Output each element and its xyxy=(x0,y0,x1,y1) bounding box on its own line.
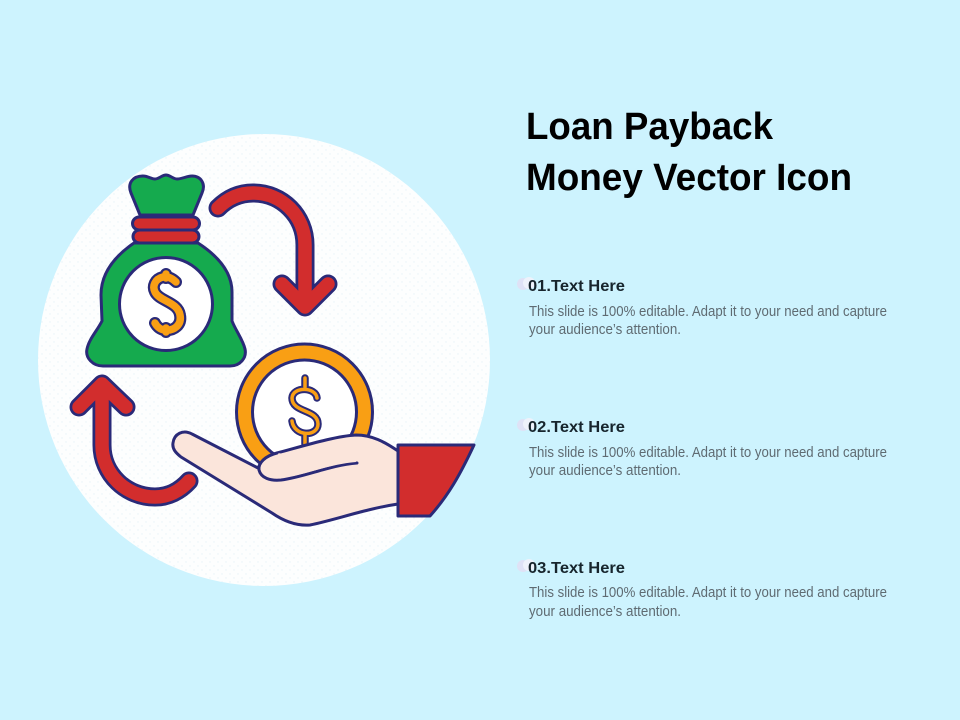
icon: hand and sleeve xyxy=(173,432,474,525)
description 02: your audience’s attention. xyxy=(529,462,681,479)
title xyxy=(526,106,852,199)
bullet 03 xyxy=(517,559,535,572)
description 01: This slide is 100% editable. Adapt it to your need and capture xyxy=(529,303,887,320)
bag body xyxy=(87,243,245,366)
arrow: bag to coin xyxy=(218,193,328,307)
coin dollar sign xyxy=(292,378,318,444)
item 01 xyxy=(517,277,887,338)
description 02: This slide is 100% editable. Adapt it to your need and capture xyxy=(529,444,887,461)
panel: white dotted circle xyxy=(38,134,490,586)
item 03 xyxy=(517,559,887,620)
icon: coin xyxy=(236,344,372,480)
description 03: This slide is 100% editable. Adapt it to your need and capture xyxy=(529,584,887,601)
icon: money bag xyxy=(87,175,245,366)
description 03: your audience’s attention. xyxy=(529,603,681,620)
description 03 xyxy=(529,584,887,620)
title: Money Vector Icon xyxy=(526,157,852,199)
heading 01: 01.Text Here xyxy=(528,278,625,295)
heading 03: 03.Text Here xyxy=(528,560,625,577)
sleeve xyxy=(398,445,474,516)
description 01: your audience’s attention. xyxy=(529,321,681,338)
thumb line xyxy=(259,453,357,480)
description 01 xyxy=(529,303,887,338)
bullet 01 xyxy=(517,277,535,290)
heading 02: 02.Text Here xyxy=(528,419,625,436)
arrow: hand to bag xyxy=(79,384,189,497)
bullet 02 xyxy=(517,418,535,431)
bag medallion xyxy=(120,258,212,350)
description 02 xyxy=(529,444,887,479)
thumb fill cover xyxy=(261,445,356,478)
bag ties xyxy=(132,217,200,243)
title: Loan Payback xyxy=(526,106,774,148)
bag neck xyxy=(130,175,203,215)
item 02 xyxy=(517,418,887,479)
icon: bag dollar sign xyxy=(154,274,180,332)
hand xyxy=(173,432,398,525)
